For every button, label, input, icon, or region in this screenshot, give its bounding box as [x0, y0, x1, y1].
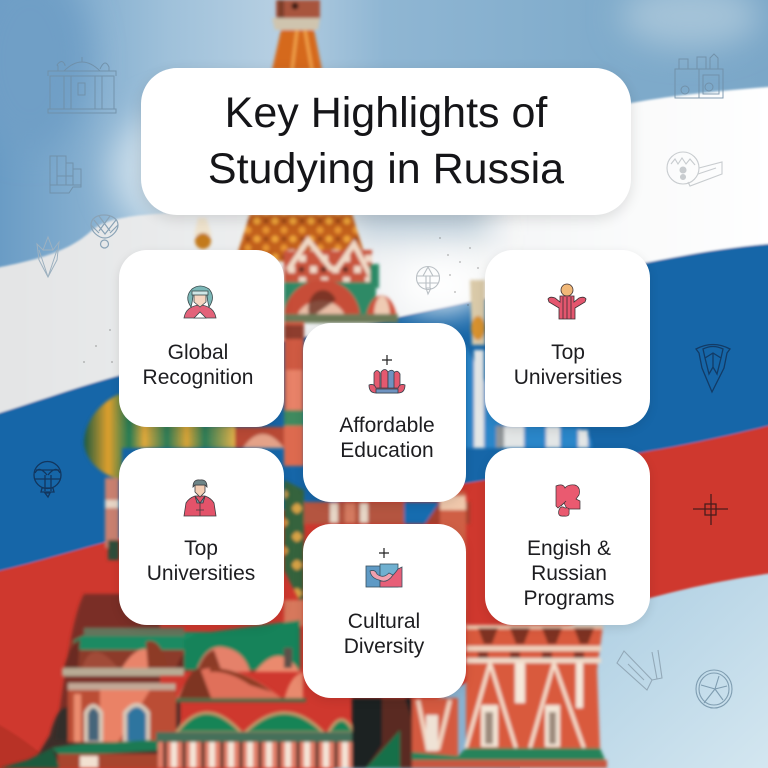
cathedral [0, 0, 607, 768]
label: Engish & [527, 537, 611, 560]
decorative line icon: chapel [48, 57, 116, 114]
title text: Studying in Russia [208, 145, 564, 193]
gold finial right [470, 280, 485, 345]
icon: red map with flower [556, 484, 580, 516]
dark gap [352, 698, 414, 768]
label: Cultural [348, 610, 420, 633]
decorative line icon: globe in flag [33, 460, 62, 498]
label: Universities [514, 366, 622, 389]
title text: Key Highlights of [225, 89, 547, 137]
title panel [141, 68, 631, 215]
left onion dome [84, 394, 235, 480]
label: Programs [523, 587, 615, 610]
decorative line icon: wheel [696, 670, 732, 708]
label: Russian [531, 562, 607, 585]
card: English and Russian Programs [485, 448, 650, 625]
card: Global Recognition [119, 250, 284, 427]
label: Universities [147, 562, 255, 585]
label [147, 537, 255, 585]
speckle [83, 237, 479, 363]
decorative line icon: shield [36, 236, 60, 278]
icon: man in red jacket [184, 480, 216, 516]
label: Global [168, 341, 228, 364]
title text [208, 89, 564, 193]
right tower fragment between dome and card [440, 486, 466, 625]
label [514, 341, 622, 389]
decorative line icon: lattice pendant [90, 214, 119, 249]
icon: plus and books in hands [368, 355, 406, 394]
main tent dome [238, 214, 374, 285]
upper roofs lower chapel [184, 620, 300, 670]
right onion dome [466, 345, 592, 448]
decorative line icon: ticket [616, 650, 662, 691]
label: Education [340, 439, 434, 462]
icon: woman with headset [184, 286, 216, 318]
icon: plus and map panels [366, 548, 402, 588]
label [344, 610, 424, 658]
label: Diversity [344, 635, 424, 658]
label: Top [184, 537, 218, 560]
gold finial left [194, 218, 212, 236]
decorative line icon: shelf [674, 54, 724, 98]
central tower column [284, 322, 304, 427]
label: Affordable [339, 414, 435, 437]
card: Cultural Diversity [303, 524, 466, 698]
label: Top [551, 341, 585, 364]
sky at lower right [520, 540, 768, 768]
label [143, 341, 253, 389]
card: Affordable Education [303, 323, 466, 502]
decorative line icon: stamp [666, 152, 722, 187]
label: Recognition [143, 366, 253, 389]
label [339, 414, 435, 462]
icon: graduate with open arms [548, 284, 586, 320]
decorative line icon: crosshair in flag [693, 494, 728, 525]
decorative line icon: block [50, 156, 82, 194]
card: Top Universities left [119, 448, 284, 625]
label [523, 537, 615, 610]
hazy sky above the white band in centre [350, 195, 490, 311]
lower right tower [412, 698, 458, 758]
lower left chapel [55, 594, 160, 740]
decorative line icon: crest in flag [695, 344, 731, 394]
card: Top Universities right [485, 250, 650, 427]
decorative line icon: round pendant centre [416, 266, 440, 296]
